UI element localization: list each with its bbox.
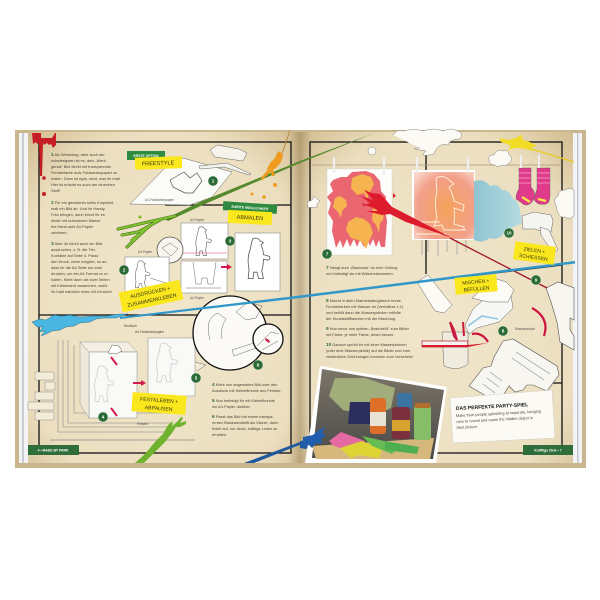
text block: steps 4 to 6: ein A4-Papier darüber. bbox=[212, 404, 251, 409]
text block: steps 8 to 10: mit Farbe, je mehr Farbe, desto besser. bbox=[326, 332, 394, 337]
red blood drips top left bbox=[32, 133, 56, 196]
label: Ausdrücken + Zusammenkleben: AUSDRÜCKEN + bbox=[130, 285, 171, 300]
paper spread bbox=[28, 132, 573, 463]
text block: steps 4 to 6: renten Blackwandstift als Skizze, dann bbox=[212, 420, 278, 425]
spray cone bbox=[474, 180, 522, 242]
yellow splat and line bbox=[500, 135, 574, 162]
gun sketches bbox=[422, 282, 574, 402]
step badges: 10 bbox=[506, 231, 512, 236]
text block: steps 8 to 10: 10 Danach sprüht ihr mit einer Wasserpistolen bbox=[326, 342, 407, 348]
photo: jars and water pistols bbox=[303, 366, 447, 463]
label: Neubuch and Fotokarton: Neubuch bbox=[124, 324, 137, 328]
blue streak and splat bbox=[32, 261, 575, 336]
lower green splat bbox=[135, 417, 186, 463]
card: Das perfekte Party-Spiel: race to reveal and name the hidden object in bbox=[456, 415, 533, 424]
step badges: 1 bbox=[212, 179, 215, 184]
label: Ausdrücken + Zusammenkleben bbox=[119, 280, 183, 312]
label: Mischen + Befüllen bbox=[454, 274, 498, 295]
step badges: 4 bbox=[102, 415, 105, 420]
label: Festkleben + Abpausen bbox=[131, 392, 187, 415]
label: Zielen + Schiessen bbox=[513, 241, 556, 265]
red arrows bbox=[472, 308, 546, 342]
text block: steps 1 to 3: den Druck, wenn möglich, so an, bbox=[51, 259, 107, 264]
step 7 text bbox=[326, 265, 397, 276]
text block: steps 1 to 3: genial“ Bild direkt mit transparenter bbox=[51, 164, 112, 169]
green streak and splat bbox=[118, 132, 377, 247]
text block: steps 1 to 3: schwierigsten ist es, dein „Werk- bbox=[51, 158, 108, 163]
label: Mischen + Befüllen: BEFÜLLEN bbox=[463, 284, 490, 294]
footer right bbox=[523, 445, 573, 455]
bottle and jar bbox=[417, 275, 514, 369]
text block: steps 1 to 3: 1 Als Werkzeug, aber auch am bbox=[51, 152, 104, 158]
card: Das perfekte Party-Spiel bbox=[450, 390, 555, 443]
label: Abmalen bbox=[228, 210, 272, 225]
label: Mischen + Befüllen: MISCHEN + bbox=[462, 278, 490, 287]
label: Neubuch and Fotokarton: Fenster bbox=[137, 422, 149, 426]
text block: steps 1 to 3: Stoff! bbox=[51, 188, 60, 193]
text block: steps 4 to 6: Ausdruck mit Klebefilmrolle ans Fenster. bbox=[212, 388, 281, 393]
window sketch bbox=[28, 338, 206, 440]
orange splat and line bbox=[250, 130, 290, 199]
text block: steps 1 to 3: malen. Dann ist egal, nicht, was ihr malt. bbox=[51, 176, 121, 181]
text block: steps 4 to 6: 4 Klebt nun abgemaltes Bild oder den bbox=[212, 382, 277, 388]
sketches: tracing the bear bbox=[125, 218, 280, 300]
dark red line and red splat bbox=[357, 190, 547, 347]
book cover bbox=[15, 130, 586, 468]
painting 2: sprayed bear silhouette bbox=[412, 157, 475, 256]
label: Wasserpistole: Wasserpistole bbox=[515, 327, 535, 331]
step badges: 5 bbox=[195, 376, 198, 381]
label: Ausdrücken + Zusammenkleben: ZUSAMMENKLEBEN bbox=[127, 293, 177, 309]
text block: steps 1 to 3: Hier ist erlaubt es auch am einzelnen bbox=[51, 182, 115, 187]
tag: Erste Option: ERSTE OPTION bbox=[133, 154, 159, 158]
text block: steps 1 to 3: 3 Aber ihr könnt auch ein Bild bbox=[51, 241, 102, 247]
footer right: Knifflige Ziele • 7 bbox=[534, 448, 562, 452]
text block: steps 1 to 3: malt ein Bild ab. Und ihr Handy- bbox=[51, 206, 107, 211]
text block: steps 1 to 3: Fensterfarbe aufs Fotokartonpapier zu bbox=[51, 170, 117, 175]
text block: steps 8 to 10: 9 Nun bevor uns spielen „Beschießt“ zum Bilder bbox=[326, 326, 410, 332]
step badges: 3 bbox=[229, 239, 232, 244]
text block: steps 4 to 6: erhalten. bbox=[212, 432, 227, 437]
tag: Erste Option bbox=[127, 151, 165, 160]
tag: Zweite Möglichkeit bbox=[223, 201, 277, 214]
step badges: 8 bbox=[502, 329, 505, 334]
step 7 text: und befestigt sie mit Wäscheklammern. bbox=[326, 271, 394, 276]
clouds bbox=[307, 129, 574, 218]
text block: steps 1 to 3: halten. Klebt dann die zwei Seiten bbox=[51, 277, 110, 282]
spray nozzle bbox=[522, 212, 558, 253]
text block: steps 1 to 3: ausdrucken, z. B. die Tier- bbox=[51, 247, 97, 252]
footer left: 4 • MADE BY PARK bbox=[38, 448, 69, 452]
label: Freestyle bbox=[135, 156, 182, 170]
magnifier bbox=[193, 296, 283, 370]
text block: steps 1 to 3 bbox=[51, 152, 121, 294]
step badges bbox=[98, 176, 541, 422]
text block: steps 4 to 6 bbox=[212, 382, 281, 437]
text block: steps 1 to 3: frei Hand aufs A4-Papier bbox=[51, 224, 94, 229]
step badges: 2 bbox=[123, 268, 126, 273]
text block: steps 8 to 10: (oder eine Wasserpistole) auf die Bilder und eure bbox=[326, 348, 410, 353]
text block: steps 1 to 3: drucken, um ein A4-Format zu er- bbox=[51, 271, 110, 276]
text block: steps 1 to 3: Foto bringen, dann könnt ihr es bbox=[51, 212, 105, 217]
dark blue streak and splat bbox=[244, 430, 328, 463]
text block: steps 4 to 6: fixiert auf, nur dicke, kräftige Linien zu bbox=[212, 426, 277, 431]
text block: steps 1 to 3: 2 Für ein genialeres tolles Knipsbild, bbox=[51, 200, 114, 206]
text block: steps 8 to 10: Fensterfarben mit Wasser an (Verhältnis 1:1) bbox=[326, 304, 404, 309]
text block: steps 8 to 10 bbox=[326, 298, 413, 359]
label: Neubuch and Fotokarton bbox=[124, 324, 165, 426]
label: Freestyle: FREESTYLE bbox=[142, 160, 175, 168]
socks bbox=[516, 155, 550, 205]
text block: steps 4 to 6: 6 Passt das Bild mit einem transpa- bbox=[212, 414, 274, 420]
text block: steps 1 to 3: dass ihr die A4-Seite auf zwei bbox=[51, 265, 102, 270]
text block: steps 4 to 6: 5 Nun befestigt ihr mit Klebefilmrolle bbox=[212, 398, 275, 404]
label: Zielen + Schiessen: SCHIESSEN bbox=[519, 253, 548, 263]
text block: steps 1 to 3: ihr habt natürlich einen A3-Drucker! bbox=[51, 289, 112, 294]
page edges bbox=[19, 133, 582, 463]
footer left bbox=[28, 445, 79, 455]
text block: steps 8 to 10: versteckten Zeichnungen kommen zum Vorschein! bbox=[326, 354, 413, 359]
sketch: freestyle drawing on paper: A4-Fotokartonpapier bbox=[145, 198, 175, 202]
text block: steps 1 to 3: zeichnen. bbox=[51, 230, 68, 235]
step badges: 6 bbox=[257, 363, 260, 368]
text block: steps 1 to 3: mit Klebeband zusammen, wofür bbox=[51, 283, 108, 288]
painting 1: paint splatter on paper bbox=[327, 157, 392, 255]
step badges: 9 bbox=[535, 278, 538, 283]
text block: steps 8 to 10: und befüllt dann die Wasserpistolen mithilfe bbox=[326, 310, 401, 315]
sketches: tracing the bear: A4-Papier bbox=[190, 296, 205, 300]
label: Abmalen: ABMALEN bbox=[236, 215, 263, 222]
text block: steps 8 to 10: der Kunststoffflaschen mit der Mischung. bbox=[326, 316, 396, 321]
card: Das perfekte Party-Spiel: DAS PERFEKTE PARTY-SPIEL bbox=[456, 402, 528, 412]
card: Das perfekte Party-Spiel: their picture. bbox=[456, 424, 478, 430]
label: Festkleben + Abpausen: FESTKLEBEN + bbox=[140, 397, 178, 405]
text block: steps 1 to 3: Kontakte auf Seite 4. Passt bbox=[51, 253, 99, 258]
clothesline bbox=[312, 164, 562, 166]
step 7 text: 7 Hängt eure „Blackouts“ an eine Zeitung bbox=[326, 265, 397, 271]
label: Festkleben + Abpausen: ABPAUSEN bbox=[144, 405, 173, 413]
sketches: tracing the bear: A4-Papier bbox=[190, 218, 205, 222]
sketches: tracing the bear: A4-Papier bbox=[138, 250, 153, 254]
tag: Zweite Möglichkeit: ZWEITE MÖGLICHKEIT bbox=[231, 204, 270, 211]
sketch: freestyle drawing on paper bbox=[130, 145, 251, 205]
panel frames bbox=[39, 142, 562, 453]
step badges: 7 bbox=[326, 252, 329, 257]
label: Neubuch and Fotokarton: A4-Fotokartonpapier bbox=[135, 330, 165, 334]
text block: steps 1 to 3: direkt mit schwarzem Marker bbox=[51, 218, 101, 223]
label: Zielen + Schiessen: ZIELEN + bbox=[523, 247, 546, 256]
text block: steps 8 to 10: 8 Mischt in alten Marmeladengläsern bunte bbox=[326, 298, 401, 304]
card: Das perfekte Party-Spiel: Make from people sploshing at separate, hanging bbox=[456, 409, 541, 418]
